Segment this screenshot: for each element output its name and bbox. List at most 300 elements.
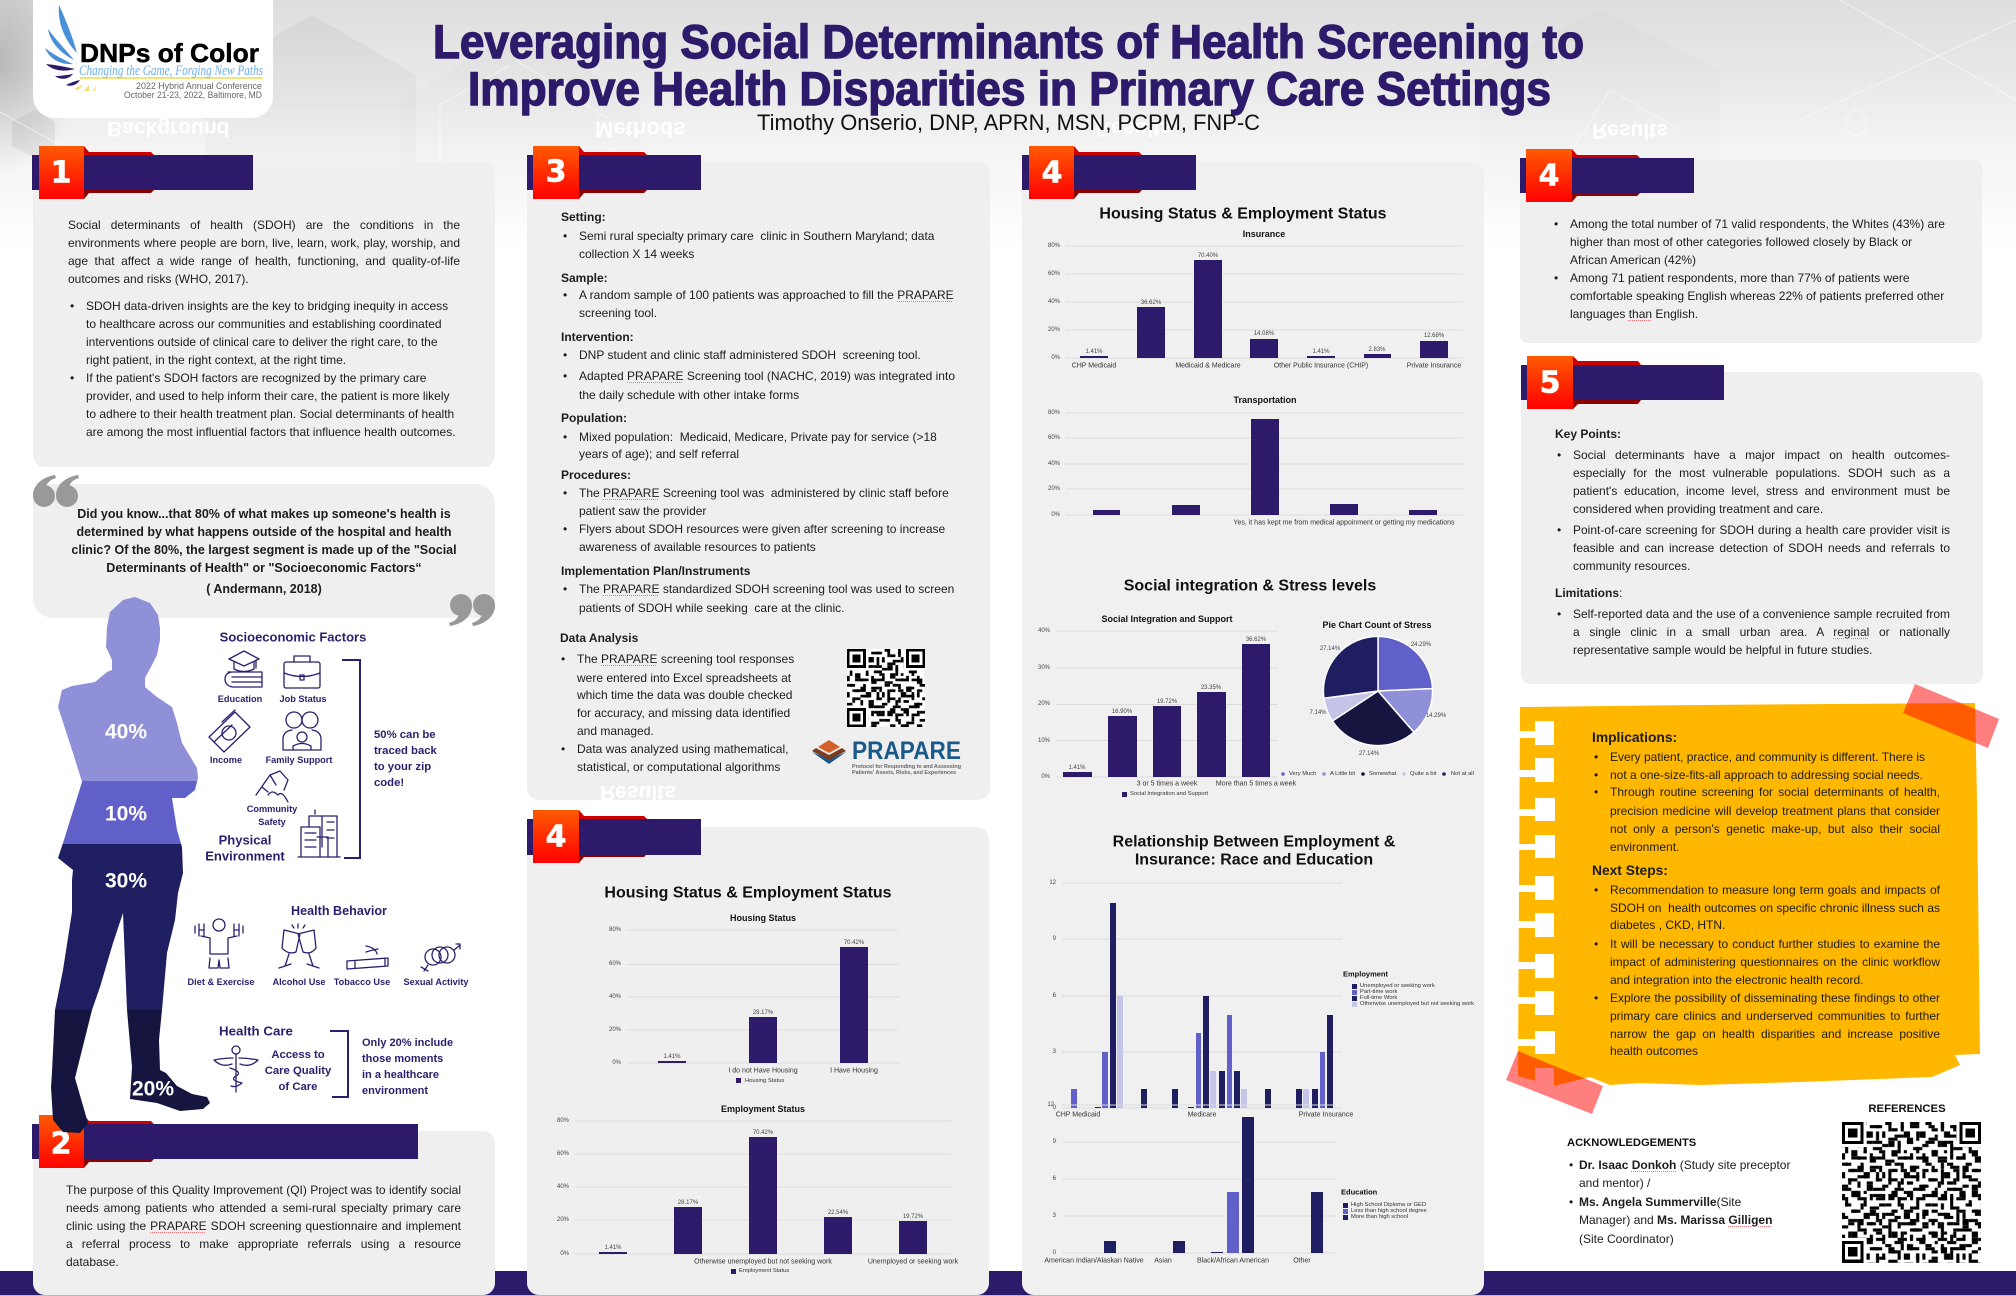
text: demographics results: Among the total number of 71 valid respondents, the Whites (43%) are	[1570, 217, 1945, 231]
text: data analysis: were entered into Excel spreadsheets at	[577, 670, 791, 684]
icon: quote mark close	[449, 594, 495, 626]
panel: results middle charts	[1022, 162, 1484, 1295]
section header 3: 3	[546, 154, 566, 190]
socioeconomic factors group: code!	[374, 777, 404, 789]
text: acknowledgements: Dr. Isaac Donkoh (Study site preceptor	[1579, 1158, 1790, 1172]
section header 4 left: 4	[546, 820, 566, 854]
grouped bar chart: education by race: 0	[1053, 1250, 1057, 1256]
text: did you know quote: clinic? Of the 80%, the largest segment is made up of the "Social	[71, 543, 457, 557]
grouped bar chart: employment by insurance: Otherwise unemployed but not seeking work	[1360, 1001, 1474, 1007]
text: implications and next steps: environment.	[1610, 840, 1679, 854]
socioeconomic factors group: Family Support	[266, 755, 332, 765]
text: acknowledgements: (Site Coordinator)	[1579, 1232, 1674, 1246]
grouped bar chart: employment by insurance	[1049, 880, 1474, 1118]
text: methods: Setting:	[561, 210, 606, 224]
text: demographics results: higher than most of other categories followed closely by Black or	[1570, 235, 1912, 249]
text: methods: The PRAPARE Screening tool was administered by clinic staff before	[579, 486, 949, 500]
person silhouette with health factor percentages: 40%	[105, 720, 147, 744]
icon: family	[283, 712, 321, 750]
socioeconomic factors group: 50% can be	[374, 729, 436, 741]
text: key points and limitations: Key Points:	[1555, 427, 1621, 441]
text: methods: Adapted PRAPARE Screening tool (NACHC, 2019) was integrated into	[579, 369, 955, 383]
bar chart: insurance: 14.08%	[1254, 331, 1275, 337]
panel: results demographics	[1520, 160, 1982, 343]
text: methods: Intervention:	[561, 330, 634, 344]
text: demographics results: African American (42%)	[1570, 253, 1696, 267]
text: key points and limitations: feasible and can increase detection of SDOH needs and referrals to	[1573, 541, 1950, 555]
grouped bar chart: education by race: 6	[1053, 1176, 1057, 1182]
section header 1	[32, 146, 253, 199]
bar chart: insurance: 12.68%	[1424, 333, 1445, 339]
text: did you know quote: ( Andermann, 2018)	[206, 582, 322, 596]
logo card: October 21-23, 2022, Baltimore, MD	[124, 90, 262, 100]
grouped bar chart: education by race: More than high school	[1351, 1214, 1408, 1220]
bar chart: housing status: 40%	[609, 994, 622, 1000]
page background with hexagon pattern	[0, 0, 2016, 250]
panel: results housing charts	[527, 827, 989, 1295]
socioeconomic factors group: Education	[218, 694, 263, 704]
bar chart: transportation: Transportation	[1233, 395, 1297, 405]
icon: briefcase	[284, 656, 320, 688]
text: data analysis: for accuracy, and missing data identified	[577, 706, 790, 720]
grouped bar chart: employment by insurance: Employment	[1343, 970, 1389, 978]
text: acknowledgements	[1570, 1158, 1790, 1246]
bar chart: housing status: 28.17%	[753, 1010, 774, 1016]
panel: methods	[527, 162, 990, 800]
section header 2	[32, 1115, 418, 1168]
text: methods: years of age); and self referral	[579, 447, 739, 461]
health behavior group: Diet & Exercise	[188, 977, 254, 987]
bar chart: social integration: Social Integration and Support	[1101, 614, 1233, 624]
text: background: right patient, in the right context, at the right time.	[86, 353, 346, 367]
person silhouette with health factor percentages: 20%	[132, 1078, 174, 1100]
icon: city buildings	[298, 810, 340, 857]
health behavior group: Tobacco Use	[334, 977, 390, 987]
text: did you know quote	[71, 507, 457, 596]
text: background: outcomes and risks (WHO, 2017).	[68, 272, 249, 286]
bar chart: transportation: 0%	[1051, 512, 1061, 518]
icon: caduceus	[214, 1046, 258, 1092]
text: implications and next steps: precision medicine will develop treatment plans that consider	[1610, 804, 1940, 818]
section header 3	[527, 146, 701, 199]
text: methods: awareness of available resources to patients	[579, 540, 816, 554]
grouped bar chart: education by race: American Indian/Alaskan Native	[1044, 1258, 1144, 1264]
text: data analysis: The PRAPARE screening tool responses	[577, 652, 794, 666]
text: implications and next steps: Recommendation to measure long term goals and impacts of	[1610, 882, 1940, 896]
bar chart: insurance: 20%	[1048, 327, 1061, 333]
health care group: environment	[362, 1085, 428, 1097]
text: implications and next steps: diabetes , CKD, HTN.	[1610, 918, 1725, 932]
bar chart: employment status: Employment Status	[739, 1268, 789, 1274]
ghost label: results inside methods panel: Results	[600, 781, 676, 804]
text: implications and next steps: narrow the gap on health disparities and increase positive	[1610, 1027, 1940, 1041]
mirrored section ghost labels: Methods	[595, 117, 685, 142]
title: Improve Health Disparities in Primary Care Settings	[468, 62, 1551, 115]
text: methods: DNP student and clinic staff administered SDOH screening tool.	[579, 348, 921, 362]
mirrored section ghost labels	[107, 117, 1668, 142]
PRAPARE logo: Protocol for Responding to and Assessing	[852, 764, 962, 770]
person silhouette with health factor percentages: 30%	[105, 870, 147, 892]
person silhouette with health factor percentages: 10%	[105, 802, 147, 826]
grouped bar chart: employment by insurance: CHP Medicaid	[1056, 1112, 1100, 1118]
bar chart: transportation: 60%	[1048, 435, 1061, 441]
icon: handshake	[256, 771, 288, 802]
text: demographics results: Among 71 patient respondents, more than 77% of patients were	[1570, 271, 1910, 285]
pie chart: stress: 24.29%	[1411, 642, 1432, 648]
bar chart: housing status: 0%	[612, 1060, 622, 1066]
bar chart: employment status: 19.72%	[903, 1214, 924, 1220]
grouped bar chart: employment by insurance: Part-time work	[1360, 989, 1397, 995]
bar chart: insurance	[1048, 229, 1463, 370]
pie chart: stress: Not at all	[1451, 771, 1474, 777]
icon: gender symbols	[421, 944, 460, 971]
bar chart: insurance: 40%	[1048, 299, 1061, 305]
text: implications and next steps: not only a person's genetic make-up, but also their social	[1610, 822, 1940, 836]
text: background: interventions outside of clinical care to deliver the right care, to the	[86, 335, 438, 349]
text: methods: collection X 14 weeks	[579, 246, 694, 260]
bar chart: housing status: 1.41%	[663, 1054, 681, 1060]
grouped bar chart: education by race: Less than high school degree	[1351, 1208, 1427, 1214]
text: background: provider, and used to help inform their care, the patient is more likely	[86, 389, 450, 403]
text: did you know quote: Did you know...that 80% of what makes up someone's health is	[77, 507, 451, 521]
text: key points and limitations: Point-of-care screening for SDOH during a health care provider visit is	[1573, 523, 1950, 537]
bar chart: employment status	[557, 1104, 959, 1274]
text: methods: The PRAPARE standardized SDOH screening tool was used to screen	[579, 582, 954, 596]
text: purpose: database.	[66, 1255, 119, 1269]
section header 4 right: 4	[1539, 158, 1559, 194]
bar chart: insurance: 0%	[1051, 355, 1061, 361]
bar chart: insurance: Insurance	[1243, 229, 1285, 239]
author line: Timothy Onserio, DNP, APRN, MSN, PCPM, FNP-C	[757, 110, 1260, 135]
text: demographics results	[1554, 217, 1945, 321]
bar chart: social integration: 40%	[1038, 628, 1051, 634]
bar chart: employment status: Otherwise unemployed but not seeking work	[694, 1258, 832, 1266]
bar chart: insurance: 1.41%	[1312, 349, 1330, 355]
icon: exercise	[195, 919, 243, 968]
text: acknowledgements: and mentor) /	[1579, 1176, 1650, 1190]
icon: wine glasses	[279, 924, 319, 968]
socioeconomic factors group: Environment	[205, 848, 285, 864]
bar chart: housing status: Housing Status	[730, 913, 796, 923]
text: background: If the patient's SDOH factors are recognized by the primary care	[86, 371, 426, 385]
bar chart: social integration: 36.62%	[1246, 637, 1267, 643]
footer band	[0, 1271, 2016, 1296]
grouped bar chart: education by race: 9	[1053, 1139, 1057, 1145]
bar chart: social integration: 20%	[1038, 701, 1051, 707]
bar chart: employment status: 22.54%	[828, 1210, 849, 1216]
PRAPARE logo	[812, 737, 962, 776]
text: key points and limitations: considered when providing treatment and care.	[1573, 502, 1823, 516]
bar chart: employment status: 70.42%	[753, 1130, 774, 1136]
text: background: age that affect a wide range of health, functioning, and quality-of-life	[68, 254, 460, 268]
bar chart: social integration: 0%	[1041, 774, 1051, 780]
text: data analysis: and managed.	[577, 724, 654, 738]
socioeconomic factors group: to your zip	[374, 761, 431, 773]
grouped bar chart: education by race: Black/African American	[1197, 1258, 1269, 1264]
bar chart: housing status: 80%	[609, 927, 622, 933]
text: methods: screening tool.	[579, 306, 657, 320]
health care group: in a healthcare	[362, 1069, 439, 1081]
section header 5	[1521, 356, 1724, 409]
health care group: Only 20% include	[362, 1037, 453, 1049]
logo card	[33, 0, 273, 118]
text: background: environments where people are born, live, learn, work, play, worship, and	[68, 236, 460, 250]
grouped bar chart: education by race: High School Diploma or GED	[1351, 1202, 1426, 1208]
health care group: Health Care	[219, 1024, 293, 1038]
acknowledgements heading: ACKNOWLEDGEMENTS	[1567, 1137, 1697, 1149]
text: did you know quote: determined by what happens outside of the hospital and health	[76, 525, 452, 539]
pie chart: stress: A Little bit	[1330, 771, 1356, 777]
text: methods: A random sample of 100 patients was approached to fill the PRAPARE	[579, 288, 954, 302]
panel: purpose	[33, 1131, 495, 1295]
logo card: DNPs of Color	[80, 38, 259, 68]
text: methods: Population:	[561, 411, 627, 425]
bracket: health care	[330, 1031, 348, 1097]
pie chart: stress: 14.29%	[1426, 713, 1447, 719]
socioeconomic factors group	[205, 630, 438, 864]
PRAPARE logo: Patients' Assets, Risks, and Experiences	[852, 770, 956, 776]
pie chart: stress: 7.14%	[1309, 710, 1327, 716]
grouped bar chart: education by race: 3	[1053, 1213, 1057, 1219]
bar chart: insurance: Private Insurance	[1407, 362, 1461, 370]
text: implications and next steps: not a one-size-fits-all approach to addressing social needs.	[1610, 768, 1923, 782]
section header 4 middle	[1022, 146, 1196, 199]
text: implications and next steps: SDOH on health outcomes on specific chronic illness such as	[1610, 901, 1940, 915]
text: methods: patients of SDOH while seeking care at the clinic.	[579, 600, 844, 614]
bar chart: insurance: 70.40%	[1198, 253, 1219, 259]
bar chart: transportation: 80%	[1048, 410, 1061, 416]
text: implications and next steps: It will be necessary to conduct further studies to examine the	[1610, 937, 1940, 951]
text: methods	[561, 210, 955, 614]
logo card: 2022 Hybrid Annual Conference	[136, 81, 262, 91]
text: purpose: a referral process to make appropriate referrals using a resource	[66, 1237, 461, 1251]
tape top right	[1903, 684, 1999, 748]
text: implications and next steps: Implications:	[1592, 730, 1677, 745]
text: implications and next steps: Explore the possibility of disseminating these findings to other	[1610, 991, 1940, 1005]
grouped bar chart: education by race	[1044, 1102, 1427, 1264]
text: methods: Sample:	[561, 271, 608, 285]
grouped bar chart: employment by insurance: 9	[1053, 936, 1057, 942]
bar chart: transportation: Yes, it has kept me from medical appoinment or getting my medications	[1233, 520, 1455, 526]
heading: relationship: Relationship Between Employment &	[1113, 834, 1396, 850]
text: purpose: needs among patients who attended a semi-rural specialty primary care	[66, 1201, 461, 1215]
bar chart: employment status: Unemployed or seeking work	[868, 1258, 959, 1266]
text: implications and next steps: Through routine screening for social determinants of health,	[1610, 785, 1940, 799]
bar chart: social integration: 19.72%	[1157, 699, 1178, 705]
pie chart: stress	[1281, 620, 1474, 777]
mirrored section ghost labels: Background	[107, 117, 230, 140]
bar chart: insurance: 36.62%	[1141, 300, 1162, 306]
mirrored section ghost labels: Results	[1592, 119, 1668, 142]
pie chart: stress: Very Much	[1289, 771, 1316, 777]
bar chart: employment status: 0%	[560, 1251, 570, 1257]
text: implications and next steps: health outcomes	[1610, 1044, 1698, 1058]
text: background: SDOH data-driven insights are the key to bridging inequity in access	[86, 299, 448, 313]
QR code: methods	[847, 649, 925, 727]
text: implications and next steps: primary care clinics and underserved communities to further	[1610, 1009, 1940, 1023]
icon: quote mark open	[33, 475, 79, 507]
bar chart: insurance: 1.41%	[1085, 349, 1103, 355]
text: demographics results: languages than English.	[1570, 307, 1698, 321]
socioeconomic factors group: Job Status	[280, 694, 326, 704]
bar chart: insurance: CHP Medicaid	[1072, 362, 1116, 370]
bar chart: housing status: 70.42%	[844, 940, 865, 946]
bar chart: employment status: Employment Status	[721, 1104, 805, 1114]
text: did you know quote: Determinants of Health" or "Socioeconomic Factors“	[106, 561, 422, 575]
text: purpose	[66, 1183, 461, 1269]
bar chart: housing status: 20%	[609, 1027, 622, 1033]
bar chart: housing status	[609, 913, 899, 1084]
text: key points and limitations: representative sample would be helpful in future studies.	[1573, 643, 1873, 657]
yellow torn notebook note	[1514, 703, 1980, 1087]
text: key points and limitations: especially for the most vulnerable populations. SDOH such as a	[1573, 466, 1950, 480]
text: background: Social determinants of health (SDOH) are the conditions in the	[68, 218, 460, 232]
health care group	[214, 1024, 453, 1097]
text: background: to healthcare across our communities and establishing coordinated	[86, 317, 442, 331]
text: key points and limitations: Limitations:	[1555, 586, 1622, 600]
icon: education	[225, 651, 262, 687]
grouped bar chart: employment by insurance: Full-time Work	[1360, 995, 1397, 1001]
health behavior group: Alcohol Use	[272, 977, 326, 987]
text: data analysis: Data Analysis	[560, 631, 638, 645]
text: purpose: clinic using the PRAPARE SDOH screening questionnaire and implement	[66, 1219, 461, 1233]
health behavior group: Health Behavior	[291, 904, 387, 918]
socioeconomic factors group: traced back	[374, 745, 438, 757]
grouped bar chart: education by race: 12	[1047, 1102, 1055, 1108]
bar chart: insurance: 2.83%	[1368, 347, 1386, 353]
bar chart: transportation: 40%	[1048, 461, 1061, 467]
bar chart: employment status: 1.41%	[604, 1245, 622, 1251]
section header 2: 2	[51, 1126, 71, 1162]
socioeconomic factors group: Safety	[258, 817, 287, 827]
bar chart: social integration: 1.41%	[1068, 765, 1086, 771]
text: implications and next steps: and integration into the electronic health record.	[1610, 972, 1864, 986]
PRAPARE logo: PRAPARE	[852, 737, 961, 765]
pie chart: stress: Pie Chart Count of Stress	[1322, 620, 1432, 630]
grouped bar chart: employment by insurance: 3	[1053, 1049, 1057, 1055]
person silhouette with health factor percentages	[51, 597, 210, 1133]
heading: social integration and stress: Social integration & Stress levels	[1124, 578, 1376, 594]
health behavior group	[188, 904, 469, 987]
text: demographics results: comfortable speaking English whereas 22% of patients preferred other	[1570, 289, 1944, 303]
pie chart: stress: Somewhat	[1369, 771, 1397, 777]
QR code: references	[1842, 1122, 1981, 1263]
bar chart: housing status: Housing Status	[745, 1078, 784, 1084]
bar chart: housing status: I Have Housing	[830, 1068, 878, 1074]
text: key points and limitations: community resources.	[1573, 559, 1690, 573]
grouped bar chart: education by race: Other	[1293, 1258, 1311, 1264]
bar chart: social integration: More than 5 times a week	[1216, 780, 1297, 788]
title: Leveraging Social Determinants of Health Screening to	[433, 15, 1584, 68]
section header 4 middle: 4	[1042, 156, 1062, 190]
pie chart: stress: 27.14%	[1320, 646, 1341, 652]
panel: discussion	[1521, 372, 1983, 684]
section header 4 left	[527, 810, 701, 863]
heading: relationship	[1113, 834, 1396, 868]
heading: relationship: Insurance: Race and Education	[1135, 852, 1373, 868]
bar chart: housing status: 60%	[609, 961, 622, 967]
text: methods: Semi rural specialty primary care clinic in Southern Maryland; data	[579, 229, 934, 243]
text: implications and next steps: Next Steps:	[1592, 863, 1668, 878]
bar chart: social integration	[1038, 614, 1297, 797]
text: acknowledgements: Ms. Angela Summerville(Site	[1579, 1195, 1741, 1209]
text: key points and limitations: Self-reported data and the use of a convenience sample recruited from	[1573, 607, 1950, 621]
bar chart: insurance: 60%	[1048, 271, 1061, 277]
health behavior group: Sexual Activity	[403, 977, 469, 987]
bar chart: employment status: 80%	[557, 1118, 570, 1124]
text: key points and limitations: Social determinants have a major impact on health outcomes-	[1573, 448, 1950, 462]
grouped bar chart: employment by insurance: Unemployed or seeking work	[1360, 983, 1435, 989]
socioeconomic factors group: Income	[210, 755, 242, 765]
references heading: REFERENCES	[1868, 1103, 1946, 1115]
heading: housing and employment: Housing Status & Employment Status	[604, 884, 892, 902]
socioeconomic factors group: Community	[247, 804, 298, 814]
mirrored section ghost labels: Results	[1096, 117, 1172, 140]
health care group: those moments	[362, 1053, 443, 1065]
bar chart: insurance: Other Public Insurance (CHIP)	[1274, 362, 1368, 370]
bar chart: employment status: 20%	[557, 1217, 570, 1223]
grouped bar chart: education by race: Education	[1341, 1188, 1378, 1196]
health care group: Access to	[271, 1049, 325, 1061]
text: data analysis: which time the data was double checked	[577, 688, 792, 702]
bar chart: social integration: 16.90%	[1112, 709, 1133, 715]
text: methods: Implementation Plan/Instruments	[561, 564, 750, 578]
bar chart: social integration: 3 or 5 times a week	[1137, 780, 1198, 788]
health care group: of Care	[279, 1081, 317, 1093]
text: background: to adhere to their health treatment plan. Social determinants of health	[86, 407, 454, 421]
heading: housing and employment middle: Housing Status & Employment Status	[1099, 206, 1387, 222]
bar chart: social integration: 30%	[1038, 665, 1051, 671]
bar chart: social integration: Social Integration and Support	[1130, 791, 1208, 797]
bracket: socioeconomic	[342, 660, 360, 858]
grouped bar chart: education by race: Asian	[1154, 1258, 1172, 1264]
bar chart: employment status: 28.17%	[678, 1200, 699, 1206]
section header 5: 5	[1540, 366, 1560, 400]
text: methods: patient saw the provider	[579, 504, 706, 518]
text: background: are among the most influential factors that influence health outcomes.	[86, 425, 456, 439]
text: key points and limitations	[1555, 427, 1950, 657]
text: key points and limitations: a single clinic in a small urban area. A reginal or nationally	[1573, 625, 1950, 639]
section header 1: 1	[51, 156, 71, 190]
tape bottom left	[1506, 1051, 1603, 1114]
socioeconomic factors group: Physical	[219, 832, 271, 848]
section header 4 right	[1520, 149, 1694, 202]
text: background	[68, 218, 460, 439]
grouped bar chart: employment by insurance: Medicare	[1188, 1112, 1216, 1118]
logo card: Changing the Game, Forging New Paths	[79, 63, 263, 79]
icon: money	[209, 710, 250, 752]
health care group: Care Quality	[265, 1065, 332, 1077]
icon: cigarette	[347, 946, 388, 969]
text: methods: Mixed population: Medicaid, Medicare, Private pay for service (>18	[579, 430, 937, 444]
bar chart: insurance: Medicaid & Medicare	[1175, 362, 1241, 370]
pie chart: stress: 27.14%	[1359, 751, 1380, 757]
text: data analysis	[560, 631, 794, 774]
grouped bar chart: employment by insurance: 6	[1053, 993, 1057, 999]
grouped bar chart: employment by insurance: 12	[1049, 880, 1057, 886]
title	[433, 15, 1584, 115]
bar chart: employment status: 40%	[557, 1184, 570, 1190]
bar chart: housing status: I do not Have Housing	[728, 1068, 798, 1074]
text: methods: Procedures:	[561, 468, 631, 482]
panel: background	[33, 162, 495, 467]
bar chart: social integration: 23.35%	[1201, 685, 1222, 691]
text: data analysis: Data was analyzed using mathematical,	[577, 742, 788, 756]
panel: did you know quote	[33, 484, 495, 618]
text: key points and limitations: patient's education, income level, stress and environment must be	[1573, 484, 1950, 498]
bar chart: social integration: 10%	[1038, 738, 1051, 744]
socioeconomic factors group: Socioeconomic Factors	[220, 630, 366, 644]
